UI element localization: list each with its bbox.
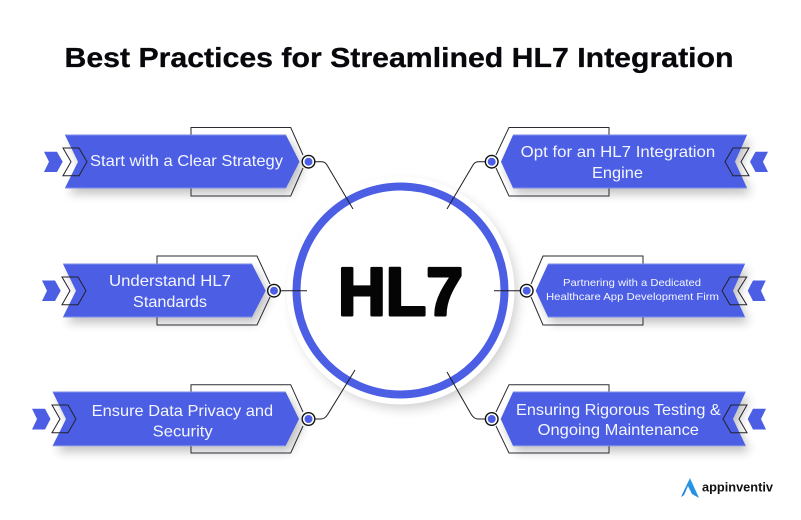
banner	[501, 135, 747, 188]
chevrons	[723, 405, 766, 433]
banner	[53, 392, 299, 446]
label: Opt for an HL7 Integration	[521, 144, 715, 161]
connector	[447, 162, 485, 209]
outline bracket	[496, 385, 609, 453]
panel: opt for an HL7 integration engine	[447, 128, 768, 209]
label	[516, 402, 721, 439]
outline bracket	[496, 128, 609, 196]
label	[92, 403, 273, 441]
label: Understand HL7	[109, 273, 231, 290]
chevrons	[32, 405, 76, 433]
label: Start with a Clear Strategy	[90, 153, 283, 170]
node	[520, 284, 533, 297]
node	[302, 413, 315, 425]
panel: understand HL7 standards	[42, 256, 307, 325]
central circle: HL7	[286, 176, 517, 408]
panel: partnering with a dedicated firm	[494, 256, 766, 325]
banner	[63, 264, 266, 317]
panel: ensuring rigorous testing and ongoing maintenance	[447, 372, 766, 453]
label	[521, 144, 715, 182]
HL7 label: HL7	[338, 254, 463, 330]
chevrons	[722, 277, 766, 305]
connector	[494, 290, 520, 292]
banner	[501, 392, 746, 446]
label: Security	[153, 424, 213, 441]
outline bracket	[191, 128, 303, 196]
node	[485, 413, 498, 425]
node	[268, 284, 280, 297]
label: Healthcare App Development Firm	[546, 291, 719, 303]
title: Best Practices for Streamlined HL7 Integration	[64, 42, 734, 73]
panel: start with a clear strategy	[44, 128, 353, 209]
label: Standards	[133, 294, 207, 311]
banner	[536, 264, 745, 317]
panel: ensure data privacy and security	[32, 370, 355, 453]
logo: appinventiv	[681, 478, 774, 498]
connector	[315, 370, 355, 419]
chevrons	[725, 148, 768, 176]
chevrons	[42, 277, 86, 305]
label	[546, 277, 719, 303]
connector	[280, 290, 307, 292]
label	[109, 273, 231, 311]
label: Ongoing Maintenance	[538, 422, 699, 439]
node	[485, 155, 498, 168]
chevrons	[44, 148, 87, 176]
icon: logo mark	[681, 478, 699, 498]
label: Ensure Data Privacy and	[92, 403, 273, 420]
label: Partnering with a Dedicated	[563, 277, 701, 289]
node	[302, 155, 315, 168]
connector	[315, 162, 353, 209]
label: Engine	[592, 165, 643, 182]
label: Ensuring Rigorous Testing &	[516, 402, 721, 419]
banner	[65, 135, 300, 188]
outline bracket	[157, 256, 270, 325]
connector	[447, 372, 485, 419]
logo wordmark: appinventiv	[702, 480, 774, 494]
outline bracket	[191, 385, 303, 453]
outline bracket	[531, 256, 643, 325]
